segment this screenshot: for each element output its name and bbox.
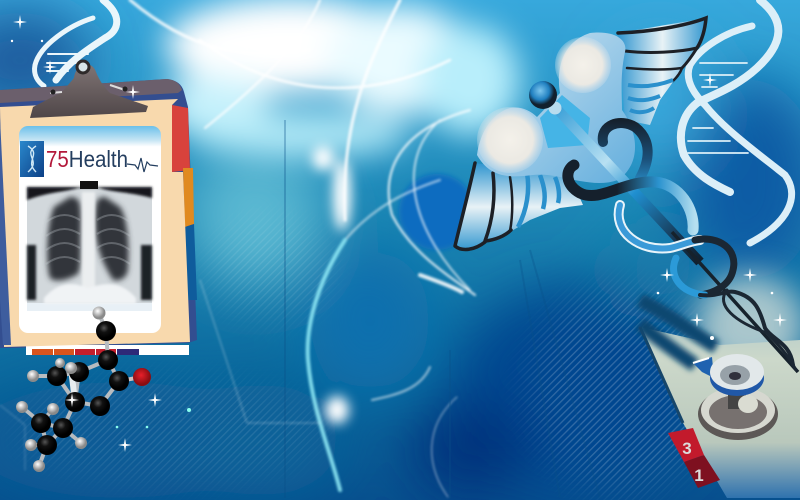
hatch texture [21,223,693,500]
manila sheet [0,99,190,347]
faint data panels [285,120,600,498]
lower wing [455,163,583,251]
serpent [568,123,796,370]
bonds [22,313,142,466]
light streaks [0,0,475,497]
stethoscope and book [640,275,800,498]
75Health logo [20,141,158,177]
stars [657,73,787,340]
carbon atoms [31,321,129,455]
DNA helix: top left [35,0,117,86]
book cover [640,327,800,498]
bright glows [313,146,351,424]
inner card [19,126,161,333]
tabs [172,105,197,300]
caduceus [455,18,798,372]
clipboard clip [30,61,148,118]
tabs 3 and 1: 3 [682,439,692,458]
scattered stars [11,15,254,452]
soft light behind book [695,275,800,375]
wing pads [477,32,635,183]
molecule model [16,306,151,472]
staff [529,81,798,372]
dark blue ball [399,174,475,250]
75Health logo: 75Health [46,146,128,172]
tubing shadow [640,300,716,365]
chest x-ray [27,181,152,311]
tabs 3 and 1 [668,428,720,488]
tabs 3 and 1: 1 [694,466,704,485]
clipboard [0,61,197,355]
upper wing [618,18,707,125]
oxygen atom [133,368,151,386]
chest piece [693,354,778,440]
hydrogen atoms [16,306,106,472]
DNA helix: top right [681,0,792,243]
molecule sparkle [65,393,79,407]
board [0,79,197,355]
